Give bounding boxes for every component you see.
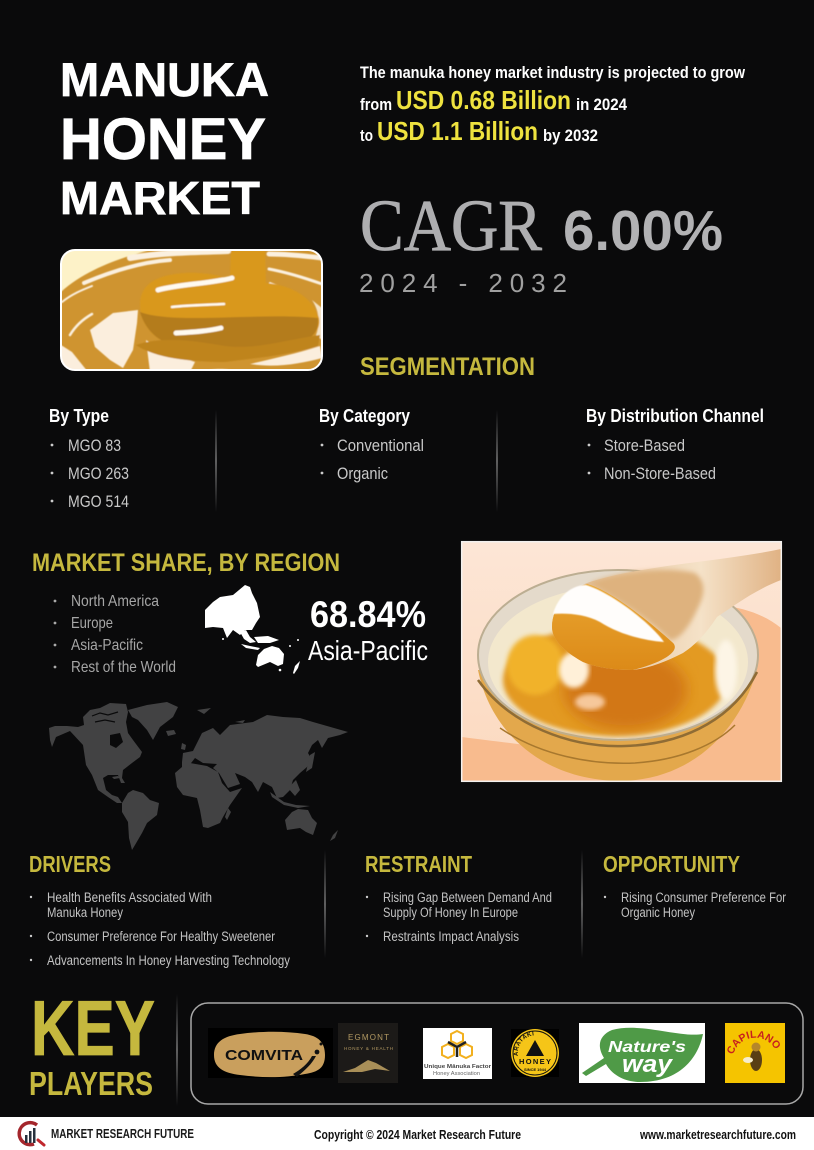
logo: arataki honey: [511, 1029, 559, 1077]
photo: honey swirl: [60, 249, 323, 372]
heading: key players: KEY: [31, 984, 155, 1072]
region list: Asia-Pacific: [71, 637, 143, 654]
title: HONEY: [60, 107, 266, 172]
market projection text: USD 1.1 Billion: [377, 116, 538, 146]
title: [60, 53, 269, 224]
footer bar: MARKET RESEARCH FUTURE: [51, 1126, 194, 1141]
logo: unique manuka factor: Unique Mānuka Factor: [424, 1064, 492, 1070]
panel: restraint: Rising Gap Between Demand And: [383, 890, 552, 905]
panel: by distribution channel: By Distribution Channel: [586, 406, 764, 426]
logo: comvita: COMVITA: [225, 1047, 303, 1064]
panel: by distribution channel: Store-Based: [604, 436, 685, 455]
panel: restraint: RESTRAINT: [365, 851, 472, 877]
logo: unique manuka factor: Honey Association: [433, 1071, 480, 1077]
panel: by type: [49, 406, 129, 511]
market projection text: to: [360, 126, 373, 145]
title: MANUKA: [60, 53, 269, 106]
CAGR: [359, 185, 723, 298]
heading: key players: PLAYERS: [29, 1065, 153, 1102]
market projection text: USD 0.68 Billion: [396, 85, 571, 115]
panel: drivers: Advancements In Honey Harvesting Technology: [47, 953, 290, 968]
panel: by type: MGO 263: [68, 464, 129, 483]
market projection text: The manuka honey market industry is projected to grow: [360, 63, 746, 82]
market projection text: from: [360, 95, 392, 114]
icon: market research future logo: [19, 1123, 44, 1145]
panel: drivers: Manuka Honey: [47, 905, 123, 920]
panel: by category: Conventional: [337, 436, 424, 455]
stat: 68.84%: 68.84%: [310, 594, 426, 635]
heading: market share: MARKET SHARE, BY REGION: [32, 549, 340, 577]
panel: by distribution channel: Non-Store-Based: [604, 464, 716, 483]
logo: nature's way: [579, 1023, 705, 1083]
market projection text: in 2024: [576, 95, 627, 114]
heading: segmentation: SEGMENTATION: [360, 353, 535, 381]
panel: by category: Organic: [337, 464, 388, 483]
map: world: [49, 702, 348, 850]
panel: drivers: DRIVERS: [29, 851, 111, 877]
region list: Europe: [71, 615, 113, 632]
stat: 68.84%: Asia-Pacific: [308, 635, 428, 666]
logo: nature's way: Nature's: [608, 1039, 686, 1056]
CAGR: CAGR: [360, 185, 542, 266]
stat: 68.84%: [308, 594, 428, 666]
logo: egmont: HONEY & HEALTH: [344, 1046, 393, 1051]
panel: drivers: Consumer Preference For Healthy Sweetener: [47, 929, 275, 944]
footer bar: [0, 1117, 814, 1150]
panel: restraint: Supply Of Honey In Europe: [383, 905, 518, 920]
title: MARKET: [60, 172, 260, 224]
region list: North America: [71, 593, 159, 610]
panel: drivers: Health Benefits Associated With: [47, 890, 212, 905]
market projection text: [360, 63, 746, 146]
map: asia-pacific: [205, 585, 300, 674]
panel: opportunity: OPPORTUNITY: [603, 851, 740, 877]
panel: opportunity: Rising Consumer Preference For: [621, 890, 786, 905]
panel: drivers: [29, 851, 290, 968]
logo panel: [191, 1003, 803, 1104]
heading: key players: [29, 984, 155, 1102]
logo: capilano: [725, 1023, 785, 1083]
CAGR: 2024 - 2032: [359, 268, 567, 298]
market projection text: by 2032: [543, 126, 598, 145]
logo: arataki honey: SINCE 1944: [524, 1067, 547, 1072]
panel: by distribution channel: [586, 406, 764, 483]
panel: restraint: [365, 851, 552, 944]
footer bar: Copyright © 2024 Market Research Future: [314, 1127, 521, 1142]
logo: capilano: CAPILANO: [727, 1030, 780, 1054]
logo: comvita: [208, 1028, 333, 1078]
panel: by type: MGO 514: [68, 492, 129, 511]
photo: honey bowl and spoon: [461, 541, 782, 782]
logo: egmont: EGMONT: [348, 1033, 389, 1042]
region list: [54, 593, 176, 676]
panel: restraint: Restraints Impact Analysis: [383, 929, 519, 944]
panel: by category: By Category: [319, 406, 410, 426]
CAGR: 6.00%: [563, 199, 723, 263]
panel: by category: [319, 406, 424, 483]
region list: Rest of the World: [71, 659, 176, 676]
panel: opportunity: [603, 851, 786, 920]
panel: opportunity: Organic Honey: [621, 905, 695, 920]
logo: unique manuka factor: [423, 1028, 492, 1079]
logo: egmont: [338, 1023, 398, 1083]
logo: arataki honey: ARATAKI: [514, 1032, 534, 1056]
panel: by type: By Type: [49, 406, 109, 426]
logo: arataki honey: HONEY: [519, 1057, 551, 1066]
logo: nature's way: way: [622, 1051, 674, 1078]
panel: by type: MGO 83: [68, 436, 121, 455]
